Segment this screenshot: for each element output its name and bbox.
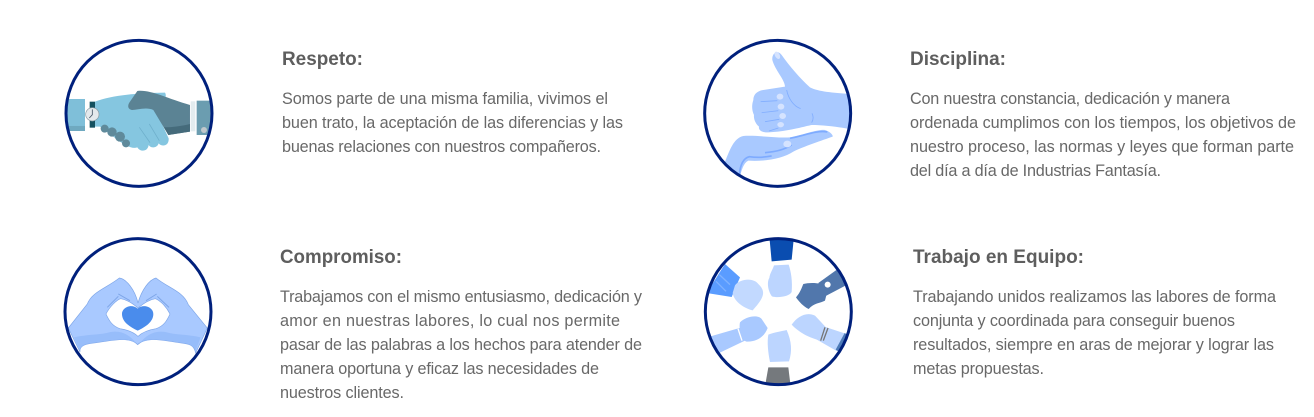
text block: Disciplina: Con nuestra constancia, dedicación y manera bbox=[910, 90, 1230, 108]
heading: Disciplina: Disciplina: bbox=[910, 48, 1006, 70]
text block: Disciplina: nuestro proceso, las normas y leyes que forman parte bbox=[910, 138, 1294, 156]
heading: Compromiso: Compromiso: bbox=[280, 246, 402, 268]
dark hand and sleeve bbox=[128, 91, 190, 135]
text block: Trabajo en Equipo: metas propuestas. bbox=[913, 360, 1044, 378]
icon: team of fists bbox=[705, 236, 851, 386]
text block: Disciplina bbox=[910, 90, 1296, 180]
light hand bbox=[95, 93, 169, 151]
upper left sleeve and fist bbox=[707, 264, 763, 310]
blue heart bbox=[122, 306, 153, 331]
bottom sleeve and fist bbox=[765, 330, 791, 386]
heading: Respeto: Respeto: bbox=[282, 48, 363, 70]
wrist watch bbox=[86, 102, 99, 128]
text block: Compromiso bbox=[280, 288, 643, 402]
text block: Respeto: buen trato, la aceptación de las diferencias y las bbox=[282, 114, 623, 132]
left wrist shading bbox=[74, 332, 136, 351]
open hand nail bbox=[783, 141, 791, 147]
open hand shading bbox=[739, 132, 827, 175]
finger nails bbox=[774, 52, 786, 128]
icon: hands forming a heart bbox=[65, 239, 211, 385]
text block: Compromiso: pasar de las palabras a los hechos para atender de bbox=[280, 336, 642, 354]
lower right arm and fist bbox=[792, 314, 849, 352]
text block: Respeto bbox=[282, 90, 623, 156]
finger lines bbox=[139, 124, 159, 143]
circle border bbox=[65, 239, 211, 385]
hands bbox=[68, 278, 207, 353]
text block: Disciplina: del día a día de Industrias Fantasía. bbox=[910, 162, 1161, 180]
right shirt cuff bbox=[191, 101, 195, 131]
dark sleeve shading bbox=[164, 124, 190, 135]
text block: Trabajo en Equipo bbox=[913, 288, 1276, 378]
lower left arm and fist bbox=[708, 316, 768, 353]
dark fingers bbox=[101, 125, 130, 147]
text block: Disciplina: ordenada cumplimos con los tiempos, los objetivos de bbox=[910, 114, 1296, 132]
top sleeve and fist bbox=[768, 236, 794, 297]
text block: Trabajo en Equipo: conjunta y coordinada para conseguir buenos bbox=[913, 312, 1235, 330]
text block: Compromiso: Trabajamos con el mismo entusiasmo, dedicación y bbox=[280, 288, 643, 306]
circle border bbox=[705, 40, 851, 186]
heading: Trabajo en Equipo: Trabajo en Equipo: bbox=[913, 246, 1084, 268]
circle border bbox=[705, 239, 851, 385]
thumbs up hand bbox=[752, 52, 849, 132]
text block: Trabajo en Equipo: Trabajando unidos realizamos las labores de forma bbox=[913, 288, 1276, 306]
open hand bbox=[723, 130, 833, 177]
upper right sleeve and fist bbox=[796, 269, 847, 309]
icon: thumbs up and open hand bbox=[705, 40, 851, 186]
finger lines bbox=[107, 294, 169, 307]
text block: Respeto: buenas relaciones con nuestros compañeros. bbox=[282, 138, 601, 156]
icon: handshake bbox=[65, 40, 212, 186]
text block: Respeto: Somos parte de una misma familia, vivimos el bbox=[282, 90, 608, 108]
text block: Compromiso: amor en nuestras labores, lo cual nos permite bbox=[280, 312, 620, 330]
right wrist shading bbox=[140, 332, 201, 351]
circle border bbox=[66, 40, 212, 186]
text block: Trabajo en Equipo: resultados, siempre en aras de mejorar y lograr las bbox=[913, 336, 1274, 354]
text block: Compromiso: manera oportuna y eficaz las necesidades de bbox=[280, 360, 599, 378]
finger creases bbox=[761, 90, 813, 131]
text block: Compromiso: nuestros clientes. bbox=[280, 384, 404, 402]
right sleeve cuff bbox=[197, 101, 212, 135]
left sleeve cuff bbox=[68, 99, 85, 131]
